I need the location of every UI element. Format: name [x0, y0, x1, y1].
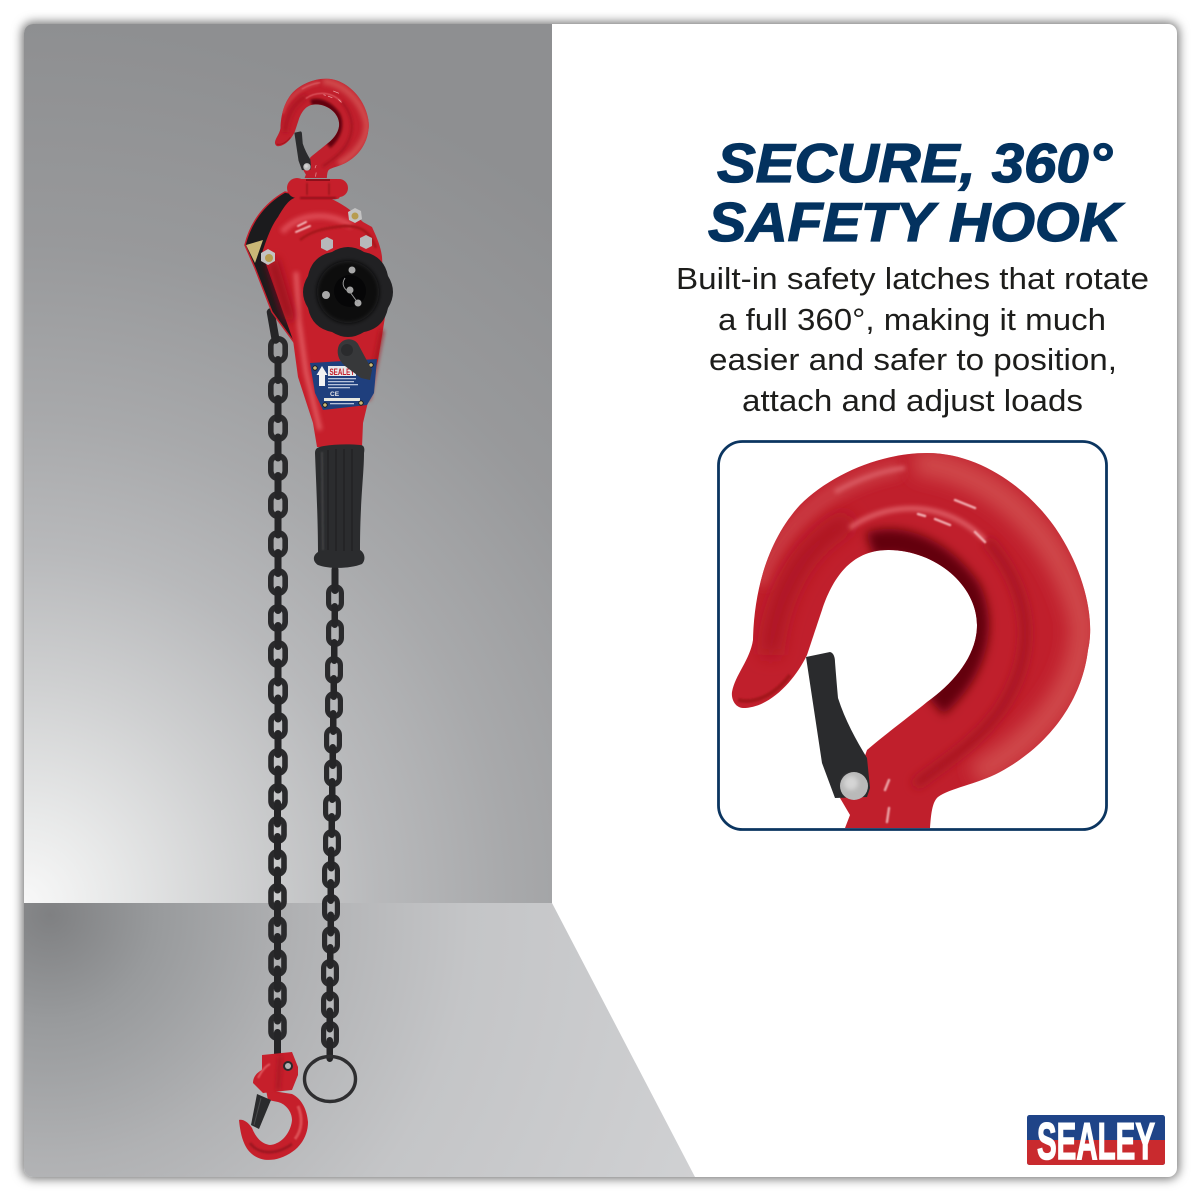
body shading [282, 216, 352, 232]
icon: lever hoist unit [245, 178, 393, 568]
panel: grey wall backdrop [24, 24, 552, 903]
swivel head [287, 178, 348, 199]
rating plate [310, 359, 377, 410]
bolts [261, 208, 372, 265]
body text: a full 360°, making it much [718, 302, 1106, 337]
rubber grip [314, 444, 364, 568]
chain: short hand chain [324, 566, 341, 1062]
selector lever [338, 339, 372, 380]
body text: attach and adjust loads [742, 383, 1083, 418]
red hoist body [262, 195, 385, 447]
hook body [239, 1090, 308, 1160]
body text: Built-in safety latches that rotate [676, 261, 1149, 296]
chain: long load chain [266, 308, 285, 1060]
title: SAFETY HOOK [708, 192, 1125, 253]
gold plate detail [246, 240, 263, 263]
panel: hook close-up inset [718, 442, 1106, 835]
back plate [245, 192, 300, 345]
safety latch [251, 1094, 271, 1129]
body text [676, 261, 1149, 418]
black knob [303, 247, 393, 337]
icon: close-up safety hook [720, 445, 1100, 835]
icon: bottom swivel hook [239, 1052, 308, 1160]
icon: top swivel hook [272, 77, 371, 180]
title: SECURE, 360° [717, 133, 1113, 194]
panel: grey floor backdrop [24, 903, 695, 1177]
icon: pull ring on hand chain [304, 1056, 356, 1102]
rating plate: SEALEY [330, 367, 355, 378]
body text: easier and safer to position, [709, 342, 1117, 377]
swivel block [253, 1052, 298, 1093]
title [708, 133, 1125, 253]
rating plate: CE [330, 391, 340, 398]
